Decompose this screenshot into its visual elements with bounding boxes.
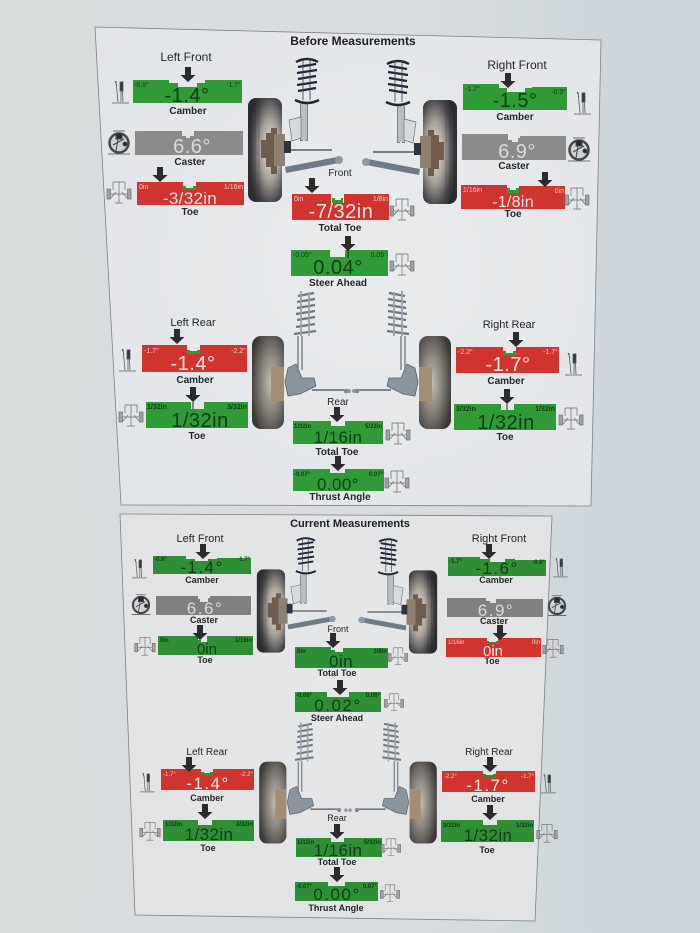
gauge: left front toe: 1/16in	[224, 184, 243, 191]
heading: right rear: Right Rear	[483, 319, 536, 331]
gauge: steer ahead: 0.02°	[314, 696, 362, 715]
gauge: steer ahead: Steer Ahead	[311, 713, 363, 723]
gauge: left rear toe	[119, 387, 248, 442]
gauge: steer ahead: 0.04°	[313, 257, 363, 279]
front left suspension illustration	[257, 537, 336, 653]
gauge: left front toe: Toe	[181, 207, 199, 218]
gauge: left front camber: -1.4°	[180, 558, 224, 577]
gauge: left front caster	[132, 595, 251, 625]
gauge: total toe: 1/8in	[373, 649, 387, 655]
gauge: right front camber: -0.9°	[532, 560, 546, 566]
gauge: right rear toe: Toe	[496, 432, 514, 443]
gauge: left front caster: 6.6°	[173, 136, 211, 158]
gauge: rear total toe: Total Toe	[316, 447, 359, 458]
gauge: left rear camber: -1.7°	[144, 347, 159, 355]
gauge: left rear toe: 3/32in	[227, 404, 247, 411]
heading: left rear: Left Rear	[186, 747, 228, 758]
gauge: left rear camber	[140, 757, 254, 803]
panel: before measurements	[95, 27, 601, 506]
gauge: thrust angle: 0.00°	[313, 885, 361, 904]
panel: current measurements	[120, 514, 568, 921]
gauge: left front toe: Toe	[197, 655, 213, 665]
gauge: left rear toe: 1/32in	[147, 404, 167, 411]
gauge: rear total toe: 5/32in	[364, 840, 381, 846]
gauge: right front toe: 0in	[483, 643, 503, 660]
gauge: right rear toe: 1/32in	[477, 412, 535, 434]
label: rear: Rear	[327, 813, 347, 823]
gauge: thrust angle: -0.07°	[296, 884, 313, 890]
gauge: total toe	[295, 633, 408, 678]
gauge: left rear camber: -2.2°	[240, 772, 254, 778]
gauge: thrust angle	[295, 867, 400, 913]
gauge: right front camber: -1.6°	[475, 559, 519, 578]
gauge: left rear camber	[119, 329, 247, 386]
gauge: thrust angle: 0.07°	[369, 472, 384, 478]
gauge: left front camber: Camber	[185, 575, 219, 585]
gauge: right rear toe: 1/32in	[516, 823, 533, 829]
gauge: right front caster: 6.9°	[498, 141, 536, 163]
gauge: left front caster: 6.6°	[187, 599, 223, 618]
gauge: right rear camber: -1.7°	[543, 348, 558, 356]
gauge: steer ahead: -0.05°	[293, 251, 312, 259]
gauge: right rear toe	[454, 389, 583, 443]
gauge: left rear toe: 1/32in	[185, 825, 233, 844]
rear right suspension illustration	[348, 722, 437, 844]
gauge: left front caster: Caster	[190, 615, 219, 625]
gauge: right rear toe: 3/32in	[456, 406, 476, 413]
gauge: thrust angle: 0.07°	[363, 884, 378, 890]
front right suspension illustration	[358, 538, 437, 654]
heading: right front: Right Front	[487, 58, 547, 72]
gauge: right front camber: -0.9°	[551, 88, 566, 96]
rear left suspension illustration	[252, 291, 356, 429]
gauge: left front toe: 0in	[139, 184, 148, 191]
gauge: left rear camber: -1.4°	[171, 353, 215, 375]
gauge: left rear camber: -1.7°	[163, 772, 176, 778]
gauge: right rear camber: -1.7°	[466, 776, 510, 795]
gauge: left front toe: 1/16in	[235, 638, 252, 644]
gauge: right rear camber: -1.7°	[486, 354, 530, 376]
gauge: right front toe: -1/8in	[492, 194, 534, 211]
gauge: thrust angle: Thrust Angle	[308, 903, 364, 913]
gauge: right front camber	[463, 73, 591, 123]
gauge: right front camber: -1.5°	[493, 90, 537, 112]
gauge: left rear toe: 3/32in	[236, 822, 253, 828]
gauge: rear total toe	[293, 407, 410, 458]
gauge: right front caster	[447, 596, 566, 626]
gauge: rear total toe: 1/32in	[294, 424, 311, 430]
gauge: steer ahead: -0.06°	[296, 693, 313, 699]
gauge: right rear camber: -2.2°	[458, 348, 473, 356]
gauge: left rear toe: Toe	[200, 843, 216, 853]
gauge: left front caster: Caster	[174, 157, 206, 168]
heading: right rear: Right Rear	[465, 747, 514, 758]
heading: left front: Left Front	[176, 533, 224, 545]
gauge: left front caster	[108, 131, 243, 168]
gauge: right rear camber: -2.2°	[444, 774, 457, 780]
front left suspension illustration	[248, 58, 343, 202]
gauge: right rear toe: Toe	[479, 845, 495, 855]
gauge: right front camber: -1.7°	[449, 559, 462, 565]
gauge: right rear camber	[442, 757, 556, 804]
label: rear: Rear	[327, 397, 350, 408]
gauge: steer ahead	[295, 680, 404, 723]
gauge: total toe	[292, 178, 414, 234]
gauge: right rear toe: 1/32in	[535, 406, 555, 413]
gauge: left front toe	[135, 625, 253, 665]
gauge: right rear camber: -1.7°	[521, 774, 535, 780]
gauge: right rear toe: 3/32in	[443, 823, 460, 829]
gauge: right front toe: 1/16in	[448, 640, 464, 646]
gauge: right front toe: 0in	[532, 640, 540, 646]
gauge: rear total toe: 5/32in	[365, 424, 382, 430]
gauge: right front camber: -1.7°	[465, 85, 480, 93]
gauge: left front camber: Camber	[169, 106, 207, 117]
gauge: steer ahead: 0.05°	[371, 251, 387, 259]
heading: right front: Right Front	[472, 533, 526, 545]
gauge: right rear camber: Camber	[487, 376, 525, 387]
gauge: rear total toe: 1/16in	[314, 841, 362, 860]
gauge: right front caster: 6.9°	[478, 601, 514, 620]
gauge: total toe: 0in	[294, 196, 303, 203]
front right suspension illustration	[362, 60, 457, 204]
gauge: left front camber	[132, 544, 251, 585]
gauge: right rear toe: 1/32in	[464, 826, 512, 845]
gauge: right front toe: 1/16in	[463, 187, 482, 194]
gauge: rear total toe	[296, 824, 401, 867]
gauge: thrust angle: Thrust Angle	[309, 492, 371, 503]
gauge: right rear toe	[441, 805, 557, 855]
label: front: Front	[328, 168, 352, 179]
gauge: steer ahead	[291, 236, 414, 289]
gauge: left rear camber: Camber	[176, 375, 214, 386]
gauge: right front camber	[448, 544, 568, 585]
label: front: Front	[327, 624, 349, 634]
gauge: left front camber: -0.9°	[154, 557, 167, 563]
title: current measurements: Current Measurements	[290, 518, 410, 530]
gauge: right front toe: Toe	[504, 209, 522, 220]
gauge: right front toe	[461, 172, 589, 220]
gauge: left rear toe: Toe	[188, 431, 206, 442]
gauge: right front camber: Camber	[479, 575, 513, 585]
gauge: left front camber: -1.7°	[226, 81, 241, 89]
gauge: left front camber: -0.9°	[134, 81, 149, 89]
rear left suspension illustration	[259, 722, 348, 844]
gauge: left front camber: -1.7°	[237, 557, 251, 563]
gauge: rear total toe: 1/16in	[314, 428, 362, 447]
gauge: rear total toe: Total Toe	[318, 857, 356, 867]
gauge: left rear toe	[140, 804, 254, 853]
gauge: right front toe	[446, 625, 563, 666]
gauge: right front caster	[462, 134, 590, 172]
gauge: left rear camber: -1.4°	[186, 774, 230, 793]
gauge: right rear camber: Camber	[471, 794, 505, 804]
gauge: left rear toe: 1/32in	[165, 822, 182, 828]
gauge: steer ahead: Steer Ahead	[309, 278, 367, 289]
gauge: steer ahead: 0.06°	[366, 693, 381, 699]
gauge: left rear camber: Camber	[190, 793, 224, 803]
gauge: total toe: Total Toe	[319, 223, 362, 234]
gauge: thrust angle: -0.07°	[294, 472, 311, 478]
gauge: rear total toe: 1/32in	[297, 840, 314, 846]
gauge: left front toe: 0in	[160, 638, 169, 644]
gauge: right rear camber	[456, 332, 582, 387]
title: before measurements: Before Measurements	[290, 34, 416, 48]
gauge: total toe: -7/32in	[309, 201, 373, 223]
heading: left rear: Left Rear	[170, 317, 216, 329]
gauge: thrust angle	[293, 456, 409, 503]
gauge: left front toe: 0in	[197, 641, 217, 658]
gauge: left front toe: -3/32in	[163, 189, 217, 208]
gauge: total toe: 0in	[297, 649, 306, 655]
gauge: right front toe: 0in	[555, 188, 564, 195]
gauge: left front toe	[107, 167, 244, 218]
gauge: total toe: Total Toe	[318, 668, 356, 678]
gauge: right front toe: Toe	[484, 656, 500, 666]
gauge: total toe: 0in	[329, 652, 353, 671]
gauge: right front caster: Caster	[480, 616, 509, 626]
gauge: left rear camber: -2.2°	[231, 347, 246, 355]
gauge: thrust angle: 0.00°	[317, 475, 359, 494]
gauge: right front caster: Caster	[498, 161, 530, 172]
gauge: total toe: 1/8in	[373, 196, 388, 203]
gauge: left rear toe: 1/32in	[171, 410, 229, 432]
gauge: left front camber	[112, 67, 242, 117]
rear right suspension illustration	[347, 291, 451, 429]
heading: left front: Left Front	[160, 50, 212, 64]
gauge: left front camber: -1.4°	[165, 85, 209, 107]
gauge: right front camber: Camber	[496, 112, 534, 123]
